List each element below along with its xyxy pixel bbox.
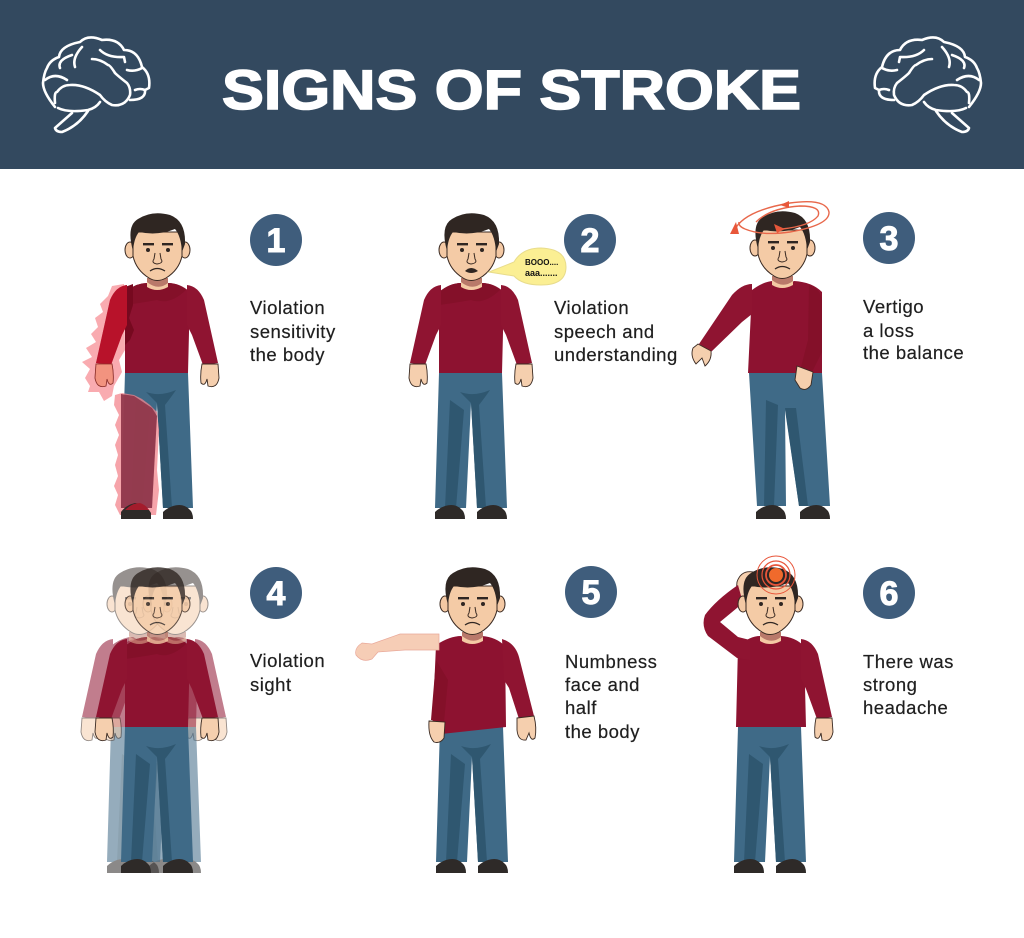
figure 4: double vision	[81, 567, 227, 873]
badge 6	[863, 567, 915, 619]
vertigo arrows	[730, 201, 829, 234]
label 2	[554, 297, 678, 365]
label 5: face and	[565, 674, 640, 695]
badge 5: 5	[582, 574, 600, 612]
raised hand	[737, 572, 756, 606]
label 6: headache	[863, 697, 948, 718]
sensitivity glow: arm	[82, 284, 125, 401]
figure 3: vertigo	[692, 211, 830, 519]
label 5: the body	[565, 721, 640, 742]
icon: brain right	[875, 37, 981, 132]
header banner	[0, 0, 1024, 169]
label 5: half	[565, 697, 597, 718]
torso	[736, 636, 806, 727]
label 6	[863, 651, 954, 718]
label 2: Violation	[554, 297, 629, 318]
torso	[432, 636, 506, 735]
label 2: speech and	[554, 321, 655, 342]
badge 3	[863, 212, 915, 264]
figure 1: loss of sensitivity on one side	[82, 213, 219, 519]
label 3: Vertigo	[863, 296, 924, 317]
label 2: understanding	[554, 344, 678, 365]
label 4: sight	[250, 674, 292, 695]
speech bubble: aaa.......	[525, 268, 558, 278]
numb leg	[121, 394, 157, 508]
title: SIGNS OF STROKE	[222, 58, 801, 121]
label 1	[250, 297, 336, 365]
speech bubble: BOOO....	[525, 258, 558, 267]
numb shoe	[121, 503, 151, 519]
badge 5	[565, 566, 617, 618]
ghost heads	[107, 567, 172, 644]
legs	[734, 727, 806, 873]
numb shoulder shading	[125, 284, 134, 345]
main head	[125, 567, 190, 644]
badge 1	[250, 214, 302, 266]
label 5: Numbness	[565, 651, 657, 672]
figure 6: strong headache	[704, 556, 833, 873]
legs	[436, 727, 508, 873]
badge 6: 6	[880, 575, 898, 613]
label 6: strong	[863, 674, 917, 695]
icon: brain left	[43, 37, 149, 132]
raised arm	[704, 585, 750, 660]
pain rings	[757, 556, 795, 594]
label 3	[863, 296, 964, 363]
figure 5: numbness in face and half the body	[356, 567, 536, 873]
speech bubble	[489, 248, 566, 285]
label 6: There was	[863, 651, 954, 672]
label 4	[250, 650, 325, 695]
badge 1: 1	[267, 222, 285, 260]
label 3: the balance	[863, 342, 964, 363]
badge 2	[564, 214, 616, 266]
numb hand	[95, 364, 113, 387]
figure 2: speech disorder	[409, 213, 533, 519]
legs	[749, 373, 830, 506]
label 3: a loss	[863, 320, 914, 341]
label 4: Violation	[250, 650, 325, 671]
numb arm	[96, 285, 127, 365]
label 1: Violation	[250, 297, 325, 318]
numb arm	[356, 634, 439, 660]
label 5	[565, 651, 657, 742]
badge 2: 2	[581, 222, 599, 260]
sensitivity glow: leg	[114, 393, 159, 515]
lowered arm	[801, 639, 833, 741]
label 1: the body	[250, 344, 325, 365]
main body	[95, 637, 219, 873]
badge 3: 3	[880, 220, 898, 258]
badge 4	[250, 567, 302, 619]
badge 4: 4	[267, 575, 286, 613]
ghost bodies	[81, 637, 205, 873]
label 1: sensitivity	[250, 321, 336, 342]
